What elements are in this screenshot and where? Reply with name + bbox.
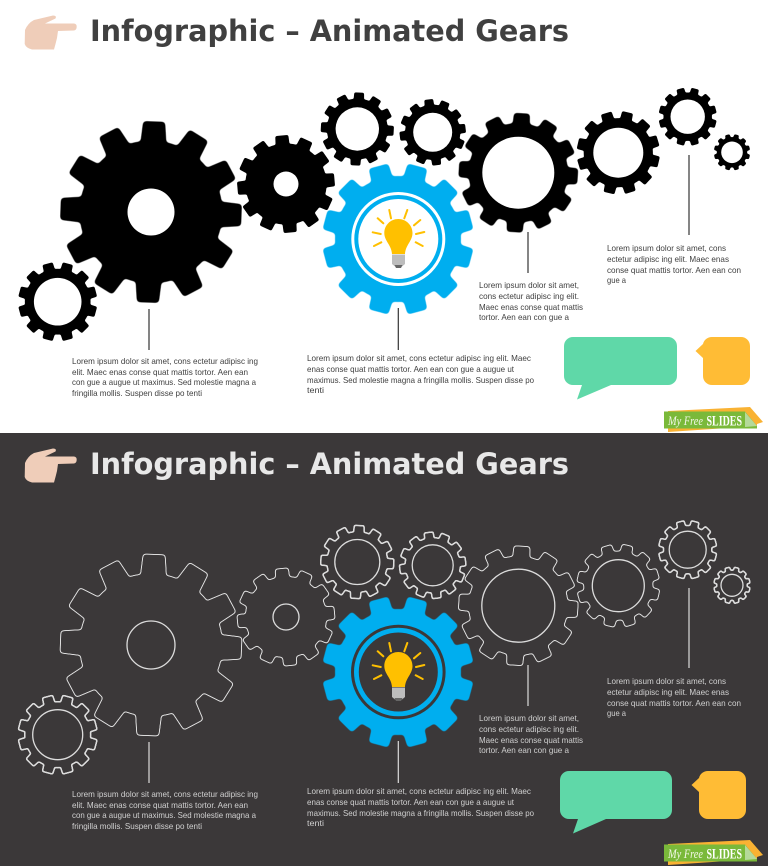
title: Infographic – Animated Gears <box>90 447 569 481</box>
text block 4 <box>607 244 741 285</box>
text block 4: gue a <box>607 276 626 285</box>
gear: large <box>60 121 242 303</box>
connector lines <box>149 588 689 783</box>
text block 1: fringilla mollis. Suspen disse po tenti <box>72 389 202 398</box>
speech bubble: orange <box>692 771 746 819</box>
gear outline: ring small <box>653 515 722 584</box>
gear: top two <box>397 96 469 168</box>
icon: pointing hand <box>25 448 77 482</box>
text block 4: conse quat mattis tortor. Aen ean con <box>607 266 741 275</box>
text block 2 <box>307 787 534 828</box>
text block 1: Lorem ipsum dolor sit amet, cons ectetur adipisc ing <box>72 790 258 799</box>
panel: light version <box>0 0 768 433</box>
text block 3: cons ectetur adipisc ing elit. <box>479 725 579 734</box>
text block 3: cons ectetur adipisc ing elit. <box>479 292 579 301</box>
gear: ring tiny <box>710 131 754 174</box>
text block 1: con gue a augue ut maximus. Sed molestie magna a <box>72 378 256 387</box>
text block 4: Lorem ipsum dolor sit amet, cons <box>607 244 726 253</box>
gear: ring small <box>653 82 722 151</box>
gear outline: ring large <box>457 544 580 667</box>
outline gears <box>11 515 754 782</box>
gear: ring medium <box>570 104 667 201</box>
text block 3 <box>479 281 583 322</box>
gear outline: second <box>235 566 337 668</box>
text block 2: maximus. Sed molestie magna a fringilla mollis. Suspen disse po <box>307 809 534 818</box>
text block 2: enas conse quat mattis tortor. Aen ean con gue a augue ut <box>307 365 515 374</box>
outline gear holes <box>33 531 743 760</box>
logo: MyFreeSlides <box>664 407 763 432</box>
text block 4: ectetur adipisc ing elit. Maec enas <box>607 688 729 697</box>
gear: small left <box>11 255 105 349</box>
text block 2: tenti <box>307 386 324 395</box>
text block 2: Lorem ipsum dolor sit amet, cons ectetur adipisc ing elit. Maec <box>307 787 531 796</box>
text block 1: con gue a augue ut maximus. Sed molestie magna a <box>72 811 256 820</box>
text block 2: maximus. Sed molestie magna a fringilla mollis. Suspen disse po <box>307 376 534 385</box>
text block 1: Lorem ipsum dolor sit amet, cons ectetur adipisc ing <box>72 357 258 366</box>
text block 4: gue a <box>607 709 626 718</box>
gear: top one <box>320 92 395 166</box>
text block 3: tortor. Aen ean con gue a <box>479 746 569 755</box>
gear outline: small left <box>11 688 105 782</box>
speech bubble: green <box>564 337 677 400</box>
text block 3: Maec enas conse quat mattis <box>479 736 583 745</box>
icon: pointing hand <box>25 16 77 50</box>
gear outline: ring medium <box>570 537 667 634</box>
text block 2 <box>307 354 534 395</box>
gear holes <box>34 100 743 326</box>
text block 3: Lorem ipsum dolor sit amet, <box>479 281 579 290</box>
connector lines <box>149 155 689 350</box>
gear: second <box>235 133 337 235</box>
text block 1 <box>72 357 258 398</box>
text block 4: ectetur adipisc ing elit. Maec enas <box>607 255 729 264</box>
text block 4 <box>607 677 741 718</box>
text block 3: Lorem ipsum dolor sit amet, <box>479 714 579 723</box>
text block 3: Maec enas conse quat mattis <box>479 303 583 312</box>
gear: blue with bulb <box>308 582 488 762</box>
text block 3 <box>479 714 583 755</box>
text block 4: conse quat mattis tortor. Aen ean con <box>607 699 741 708</box>
text block 2: enas conse quat mattis tortor. Aen ean con gue a augue ut <box>307 798 515 807</box>
gear: ring large <box>457 111 580 234</box>
gear outline: large <box>60 554 242 736</box>
gear outline: top two <box>397 529 469 601</box>
text block 1 <box>72 790 258 831</box>
gear: blue with bulb <box>308 149 488 329</box>
text block 3: tortor. Aen ean con gue a <box>479 313 569 322</box>
text block 1: elit. Maec enas conse quat mattis tortor. Aen ean <box>72 368 248 377</box>
text block 1: fringilla mollis. Suspen disse po tenti <box>72 822 202 831</box>
speech bubble: orange <box>696 337 750 385</box>
gear outline: ring tiny <box>710 564 754 607</box>
panel: dark version <box>0 433 768 866</box>
black gears <box>11 82 754 349</box>
gear outline: top one <box>320 525 395 599</box>
speech bubble: green <box>560 771 672 834</box>
logo: MyFreeSlides <box>664 840 763 865</box>
text block 2: tenti <box>307 819 324 828</box>
text block 4: Lorem ipsum dolor sit amet, cons <box>607 677 726 686</box>
text block 2: Lorem ipsum dolor sit amet, cons ectetur adipisc ing elit. Maec <box>307 354 531 363</box>
title: Infographic – Animated Gears <box>90 14 569 48</box>
text block 1: elit. Maec enas conse quat mattis tortor. Aen ean <box>72 801 248 810</box>
